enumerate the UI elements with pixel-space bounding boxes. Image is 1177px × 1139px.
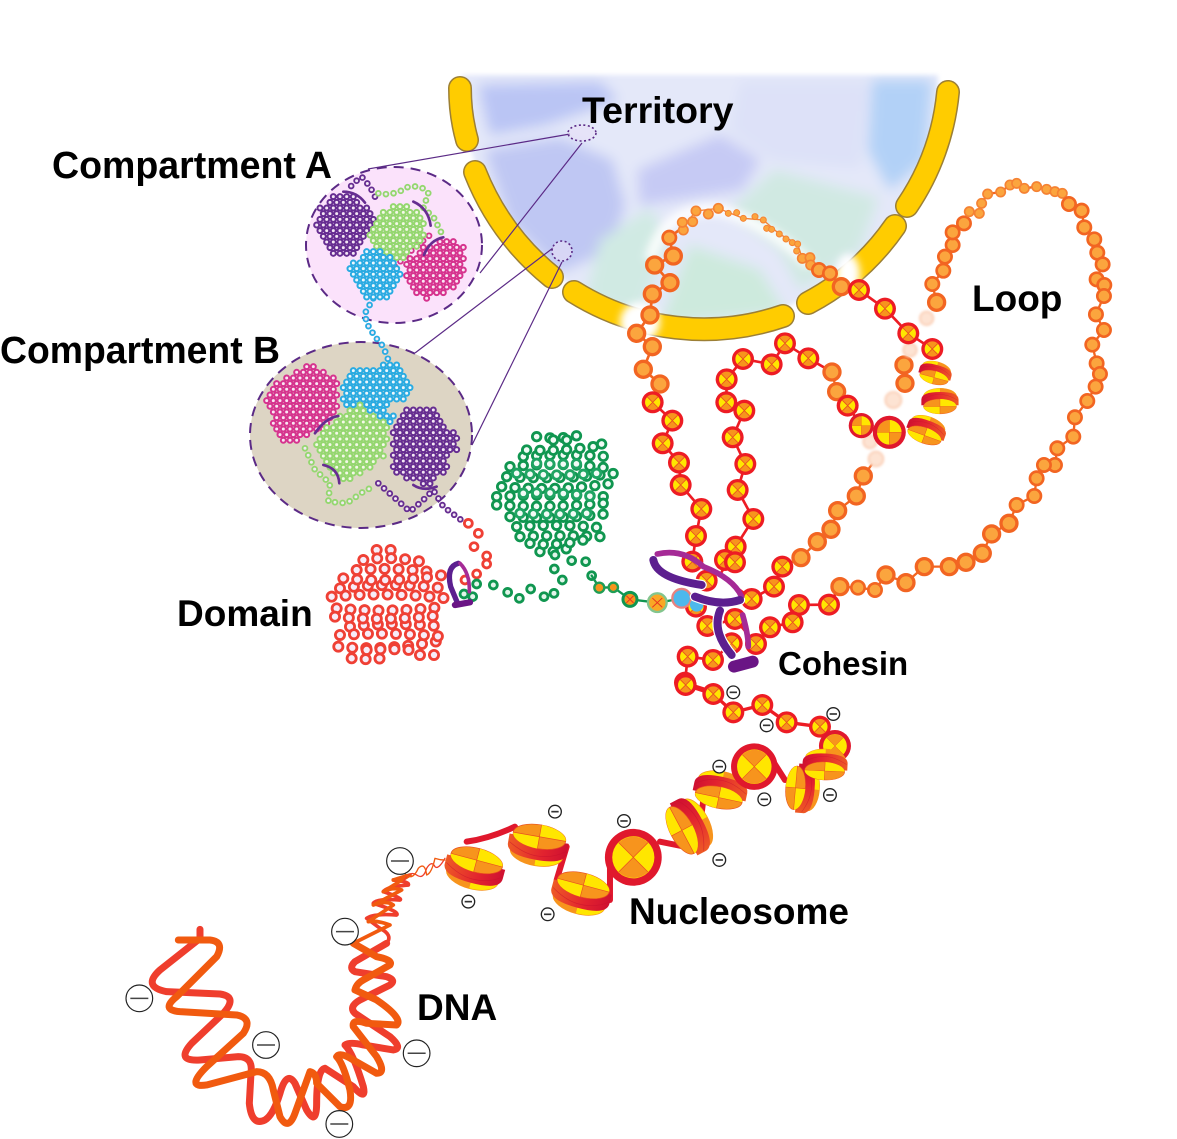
territory marker ellipses	[552, 125, 596, 261]
label: DNA: DNA	[417, 987, 497, 1028]
label: Nucleosome: Nucleosome	[629, 891, 849, 932]
compartment ring clusters	[267, 177, 467, 522]
orange beads	[629, 179, 1111, 597]
label: Domain: Domain	[177, 593, 313, 634]
label: Cohesin: Cohesin	[778, 645, 908, 682]
label: Compartment B: Compartment B	[0, 330, 280, 372]
nucleosome fibre	[440, 686, 851, 921]
DNA negative charges	[126, 848, 430, 1137]
domain rings and cohesin	[332, 435, 673, 659]
compartment B circle	[250, 342, 472, 528]
DNA double helix	[126, 848, 445, 1137]
compartment A circle	[306, 167, 482, 323]
negative charges	[462, 686, 840, 921]
blue highlighted beads	[672, 589, 703, 612]
label: Territory: Territory	[582, 89, 734, 131]
linker beads between cohesin and nucleosomes	[675, 674, 831, 738]
red nucleosome beads	[642, 279, 943, 694]
label: Compartment A: Compartment A	[52, 145, 332, 187]
cohesin rings on loop	[653, 553, 753, 667]
zoom lines from nucleus to compartments	[368, 134, 582, 445]
loop strands	[637, 183, 1104, 692]
nucleus interior with territories	[462, 73, 940, 318]
side-view nucleosomes in loop	[903, 358, 959, 450]
pale faded beads	[863, 312, 933, 466]
nuclear envelope segments	[460, 88, 948, 329]
enlarged face-on nucleosomes in loop	[849, 413, 906, 449]
label: Loop: Loop	[972, 278, 1062, 319]
chromatin loop strands and beads	[629, 179, 1111, 694]
linker DNA connectors	[467, 737, 827, 900]
